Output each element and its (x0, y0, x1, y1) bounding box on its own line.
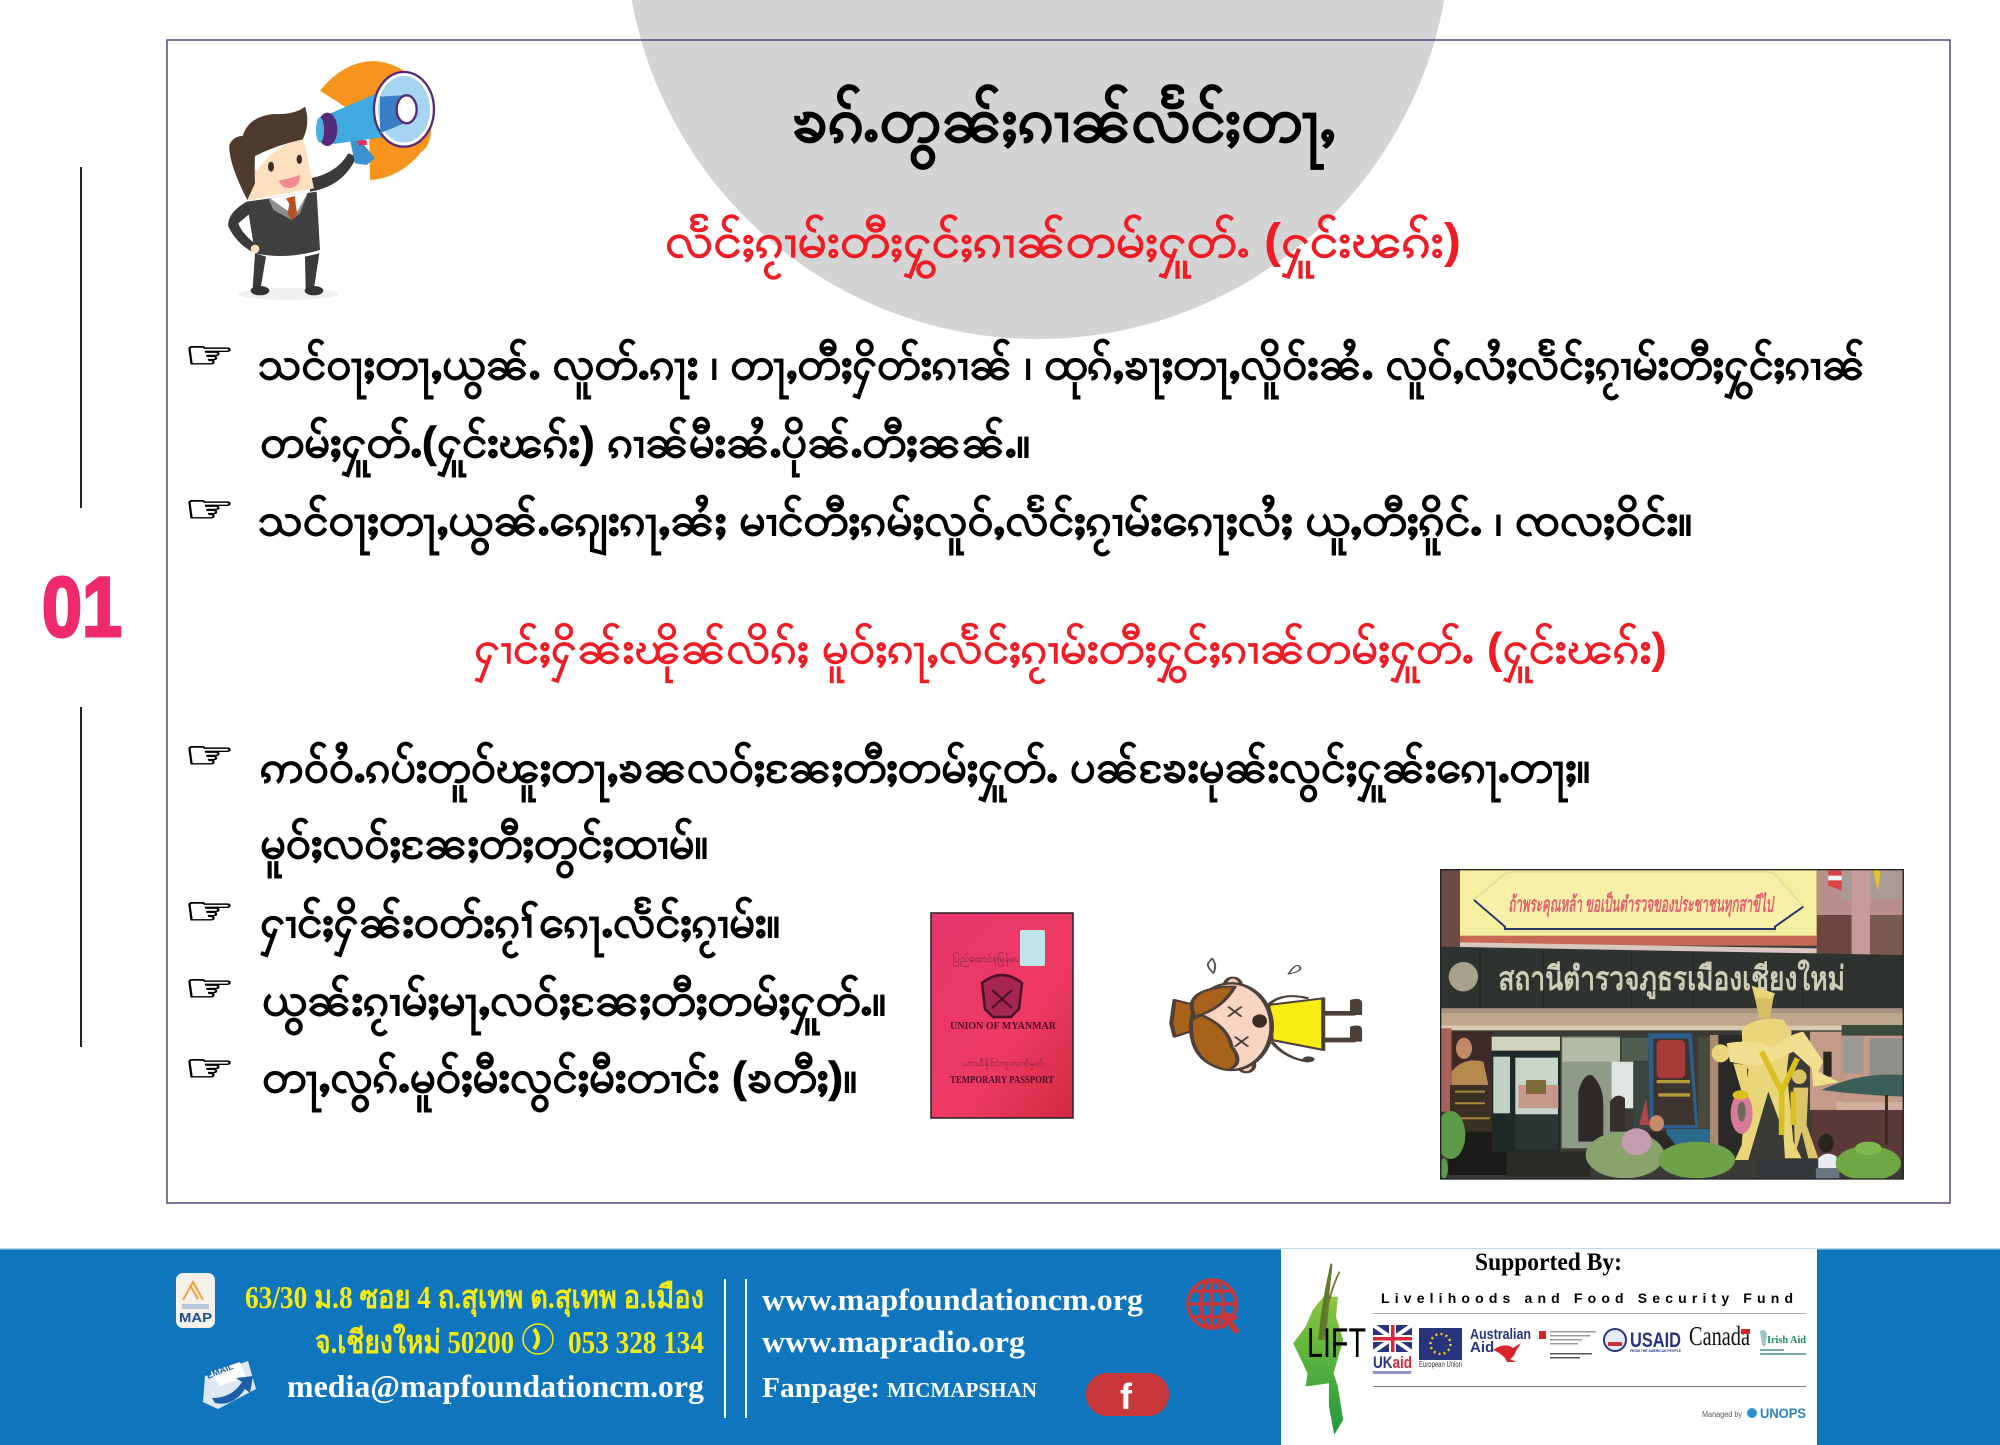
icon: MAP foundation logo (176, 1273, 215, 1328)
section number 01 with side rules: 01 (42, 560, 122, 654)
logo: European Union (1419, 1328, 1462, 1369)
heading: red section one: လႅင်ႈၵႂၢမ်းတီႈႁွင်ႈၵၢၼ်တမ်ႈႁူတ်ႉ (ႁူင်းၽၵ်း) (665, 212, 1461, 281)
text block: second section bullets: ႁၢင်ႈႁိၼ်းဝတ်းၵႂၢ်ၵေႃႉလႅင်ႈၵႂၢမ်း။ (260, 896, 780, 958)
logo: Australian Aid: Australian (1470, 1326, 1531, 1343)
footer contact: address and email (176, 1273, 704, 1409)
icon: email envelope (203, 1361, 256, 1409)
text block: first section bullets: ☞ (184, 487, 235, 531)
content frame (167, 40, 1950, 1203)
footer links: MICMAPSHAN (887, 1378, 1037, 1402)
logo: LIFT map (1293, 1263, 1366, 1435)
icon: facebook button (1086, 1373, 1169, 1417)
text block: second section bullets: ဢဝ်ဝႆႉၵပ်းတူဝ်ၽူႈတႃႇၶၼလဝ်ႈၼႄႈတီႈတမ်ႈႁူတ်ႉ ပၼ်ၶႄးမုၼ်းလွင်ႈႁူၼ်းၵေႃႉတႃႈ။ (260, 742, 1590, 803)
panel: supporters (1281, 1249, 1817, 1445)
text block: first section bullets (184, 333, 1865, 557)
photo: temporary passport: ယာယီနိုင်ငံကူးလက်မှတ် (962, 1058, 1045, 1070)
heading: red section two: ႁၢင်ႈႁိၼ်းၽိုၼ်လိၵ်ႈ မူဝ်ႈၵႃႇလႅင်ႈၵႂၢမ်းတီႈႁွင်ႈၵၢၼ်တမ်ႈႁူတ်ႉ (ႁူင်းၽၵ်း) (474, 622, 1667, 684)
logo: Australian Aid: Aid (1470, 1339, 1494, 1356)
text block: first section bullets: တမ်ႈႁူတ်ႉ(ႁူင်းၽၵ်း) ၵၢၼ်မီးၼႆႉပိုၼ်ႉတီႈၼၼ်ႉ။ (260, 417, 1030, 478)
text block: second section bullets (184, 733, 1590, 1113)
footer links (762, 1282, 1144, 1404)
gray title circle (625, 0, 1451, 339)
logo: Swiss agency (1539, 1331, 1596, 1358)
icon: phone (523, 1324, 553, 1354)
footer band (0, 1248, 2000, 1445)
footer contact: address and email: จ.เชียงใหม่ 50200 (315, 1323, 514, 1360)
logo: Managed by UNOPS (1702, 1405, 1806, 1421)
footer links: www.mapfoundationcm.org (762, 1282, 1144, 1317)
text block: second section bullets: ☞ (184, 733, 235, 777)
logo: LIFT map: LIFT (1307, 1319, 1366, 1366)
title: ၶၵ်ႉတွၼ်ႈၵၢၼ်လႅင်ႈတႃႇ (792, 84, 1336, 169)
text block: second section bullets: တႃႇလွၵ်ႉမူဝ်ႈမီးလွင်ႈမီးတၢင်း (ၶတီႈ)။ (262, 1052, 857, 1113)
text block: second section bullets: မူဝ်ႈလဝ်ႈၼႄႈတီႈတွင်ႈထၢမ်။ (260, 818, 708, 879)
text block: first section bullets: သင်ဝႃႈတႃႇယွၼ်ႉ လူတ်ႉၵႃး ၊ တႃႇတီႈႁိတ်းၵၢၼ် ၊ ထုၵ်ႇၶႃႈတႃႇလိူဝ်းၼႆႉ လူဝ်ႇလႆႈလႅင်ႈၵႂၢမ်းတီႈႁွင်ႈၵၢၼ် (258, 338, 1865, 400)
logo: European Union: European Union (1419, 1360, 1462, 1369)
footer contact: address and email: 63/30 ม.8 ซอย 4 ถ.สุเทพ ต.สุเทพ อ.เมือง (245, 1279, 704, 1318)
icon: facebook button: f (1120, 1376, 1133, 1417)
logo: Canada: Canada (1689, 1321, 1750, 1351)
photo: temporary passport: ပြည်ထောင်စုမြန်မာ (953, 951, 1019, 967)
icon: fallen cartoon girl (1171, 958, 1362, 1072)
logo: Irish Aid: Irish Aid (1767, 1334, 1806, 1346)
icon: email envelope: EMAIL (205, 1361, 235, 1381)
icon: MAP foundation logo: MAP (179, 1310, 212, 1325)
text block: second section bullets: ☞ (184, 1046, 235, 1090)
panel: supporters: Supported By: (1475, 1249, 1622, 1276)
text block: first section bullets: သင်ဝႃႈတႃႇယွၼ်ႉၵျေးၵႃႇၼႆႈ မၢင်တီႈၵမ်ႈလူဝ်ႇလႅင်ႈၵႂၢမ်းၵေႃႈလႆႈ ယူႇတီႈၵိူင်ႉ ၊ ၸလႈဝိင်း။ (258, 494, 1692, 557)
logo: USAID: USAID (1630, 1329, 1681, 1352)
logo: Managed by UNOPS: UNOPS (1760, 1405, 1806, 1421)
footer links: www.mapradio.org (762, 1324, 1026, 1359)
logo: UK aid (1373, 1325, 1412, 1374)
icon: man with megaphone (228, 61, 434, 300)
footer contact: address and email: 053 328 134 (568, 1324, 704, 1360)
text block: second section bullets: ☞ (184, 966, 235, 1010)
photo: temporary passport (931, 913, 1073, 1118)
photo: police station with statue: ถ้าพระคุณหล้า ขอเป็นตำรวจของประชาชนทุกสาขีไป (1508, 891, 1775, 918)
logo: UK aid: UKaid (1373, 1353, 1412, 1372)
logo: USAID (1604, 1329, 1681, 1353)
logo: Irish Aid (1760, 1330, 1806, 1355)
photo: police station with statue (1436, 870, 1903, 1181)
panel: supporters: Livelihoods and Food Security Fund (1381, 1290, 1793, 1306)
photo: police station with statue: สถานีตำรวจภูธรเมืองเชียงใหม่ (1498, 959, 1845, 1000)
logo: Managed by UNOPS: Managed by (1702, 1410, 1742, 1419)
photo: temporary passport: UNION OF MYANMAR (950, 1021, 1057, 1032)
icon: globe with cursor (1188, 1280, 1240, 1334)
logo: USAID: FROM THE AMERICAN PEOPLE (1630, 1348, 1681, 1353)
footer divider lines (724, 1279, 747, 1418)
footer contact: address and email: media@mapfoundationcm.org (287, 1368, 704, 1404)
logo: Australian Aid (1470, 1326, 1531, 1362)
footer links: Fanpage: (762, 1372, 880, 1404)
text block: second section bullets: ☞ (184, 889, 235, 933)
photo: temporary passport: TEMPORARY PASSPORT (950, 1075, 1054, 1086)
text block: second section bullets: ယွၼ်းၵႂၢမ်ႈမႃႇလဝ်ႈၼႄႈတီႈတမ်ႈႁူတ်ႉ။ (262, 975, 886, 1036)
text block: first section bullets: ☞ (184, 333, 235, 377)
